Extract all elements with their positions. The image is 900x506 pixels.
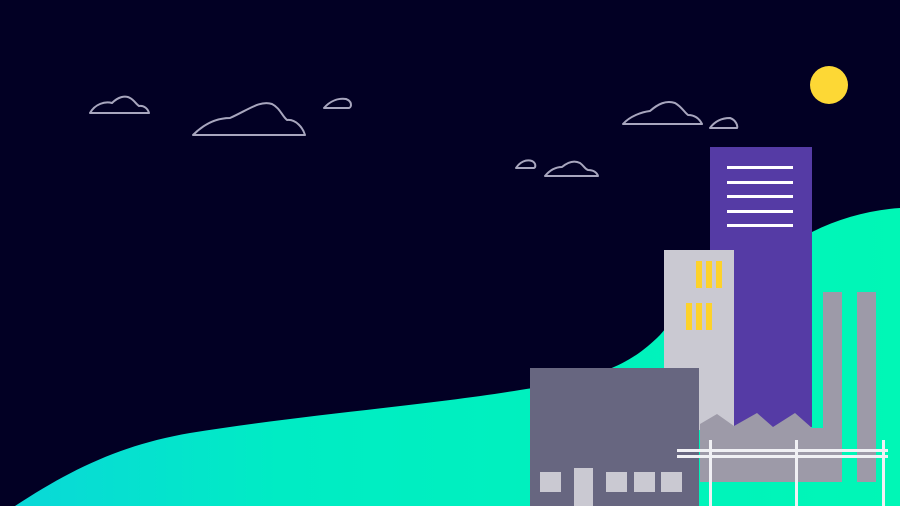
fence (677, 440, 888, 506)
clouds (90, 97, 737, 176)
main building (530, 368, 699, 506)
chimneys (823, 292, 876, 482)
grey tower (664, 250, 734, 430)
purple tower (710, 147, 812, 427)
hill (15, 208, 900, 506)
sun (810, 66, 848, 104)
factory roof (700, 413, 842, 482)
